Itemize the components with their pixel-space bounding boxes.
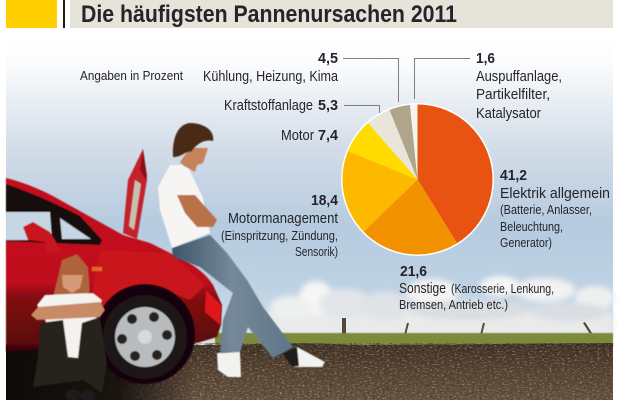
label: Motor: Motor [281,128,314,144]
car body [6,178,222,352]
label: Sonstige: 21,6 [400,263,427,280]
crossed arms [31,302,105,320]
label: Kühlung: Kühlung, Heizung, Kima [203,69,339,85]
label: Motormanagement: Sensorik) [295,244,338,259]
illustration: red car [6,149,222,384]
label: Auspuffanlage: Katalysator [476,106,541,122]
label: Elektrik allgemein: Beleuchtung, [500,219,563,234]
slice: Elektrik 41,2 [418,104,492,243]
wheel arch [95,284,195,384]
header: yellow block [6,0,57,28]
feet [65,389,81,400]
note: unit: Angaben in Prozent [80,68,183,83]
label: Sonstige: (Karosserie, Lenkung, [451,281,554,296]
illustration: woman sitting [31,254,107,400]
header: black divider [63,0,65,28]
window glass [6,212,52,240]
shirt [158,165,210,248]
label: Motor [281,127,339,144]
label: Motormanagement: 18,4 [311,192,339,209]
jeans [172,235,293,358]
label: Elektrik allgemein: 41,2 [500,167,527,184]
label: Kraftstoffanlage: Kraftstoffanlage [224,98,313,114]
slice: Motormanagement 18,4 [342,151,418,232]
label: Motormanagement [221,192,339,259]
slice: Auspuffanlage 1,6 [410,104,418,180]
slice: Motor 7,4 [348,123,418,180]
ground [6,343,613,400]
label: Motormanagement: Motormanagement [228,211,338,227]
right shoe [282,347,325,367]
hair [173,123,213,157]
slice: Sonstige 21,6 [364,180,457,254]
arm [177,195,217,227]
label: Auspuffanlage: Auspuffanlage, [476,69,562,85]
highlight on wing [205,290,221,325]
tyre [103,295,187,379]
illustration: man leaning on car [158,123,325,377]
label: Auspuffanlage: 1,6 [476,50,495,67]
hair [53,254,90,298]
label: Sonstige: Sonstige [399,281,446,297]
clouds [265,276,615,336]
label: Auspuffanlage: Partikelfilter, [476,87,550,103]
wing mirror [23,222,62,253]
indicator [92,267,102,271]
bright door panel [92,250,205,320]
label: Elektrik allgemein: Elektrik allgemein [500,186,610,202]
left shoe [217,352,241,377]
pie chart [341,103,494,256]
legs [33,317,107,393]
slice: Kühlung 4,5 [390,105,418,180]
leader lines [343,58,470,113]
label: Elektrik allgemein [500,167,610,250]
face [62,275,83,293]
slice: Kraftstoffanlage 5,3 [368,110,418,180]
label: Elektrik allgemein: (Batterie, Anlasser, [500,202,592,217]
label: Kühlung: 4,5 [318,50,338,67]
label: Motormanagement: (Einspritzung, Zündung, [221,228,338,243]
grass strip [215,333,613,347]
fence posts [342,318,592,336]
open bonnet [123,149,147,239]
header: beige title band [70,0,613,28]
label: Sonstige: Bremsen, Antrieb etc.) [399,297,508,312]
shadow under car [6,345,196,400]
label: Kühlung [203,50,339,85]
label: Elektrik allgemein: Generator) [500,235,552,250]
window frame [6,184,102,245]
hubcap [115,307,175,367]
label: Sonstige [399,263,554,312]
shirt [37,293,102,360]
label: Kraftstoffanlage: 5,3 [318,97,338,114]
neck and face [180,148,208,172]
label: Auspuffanlage [476,50,562,122]
title: Die häufigsten Pannenursachen 2011 [81,1,457,28]
label: Motor: 7,4 [318,127,339,144]
